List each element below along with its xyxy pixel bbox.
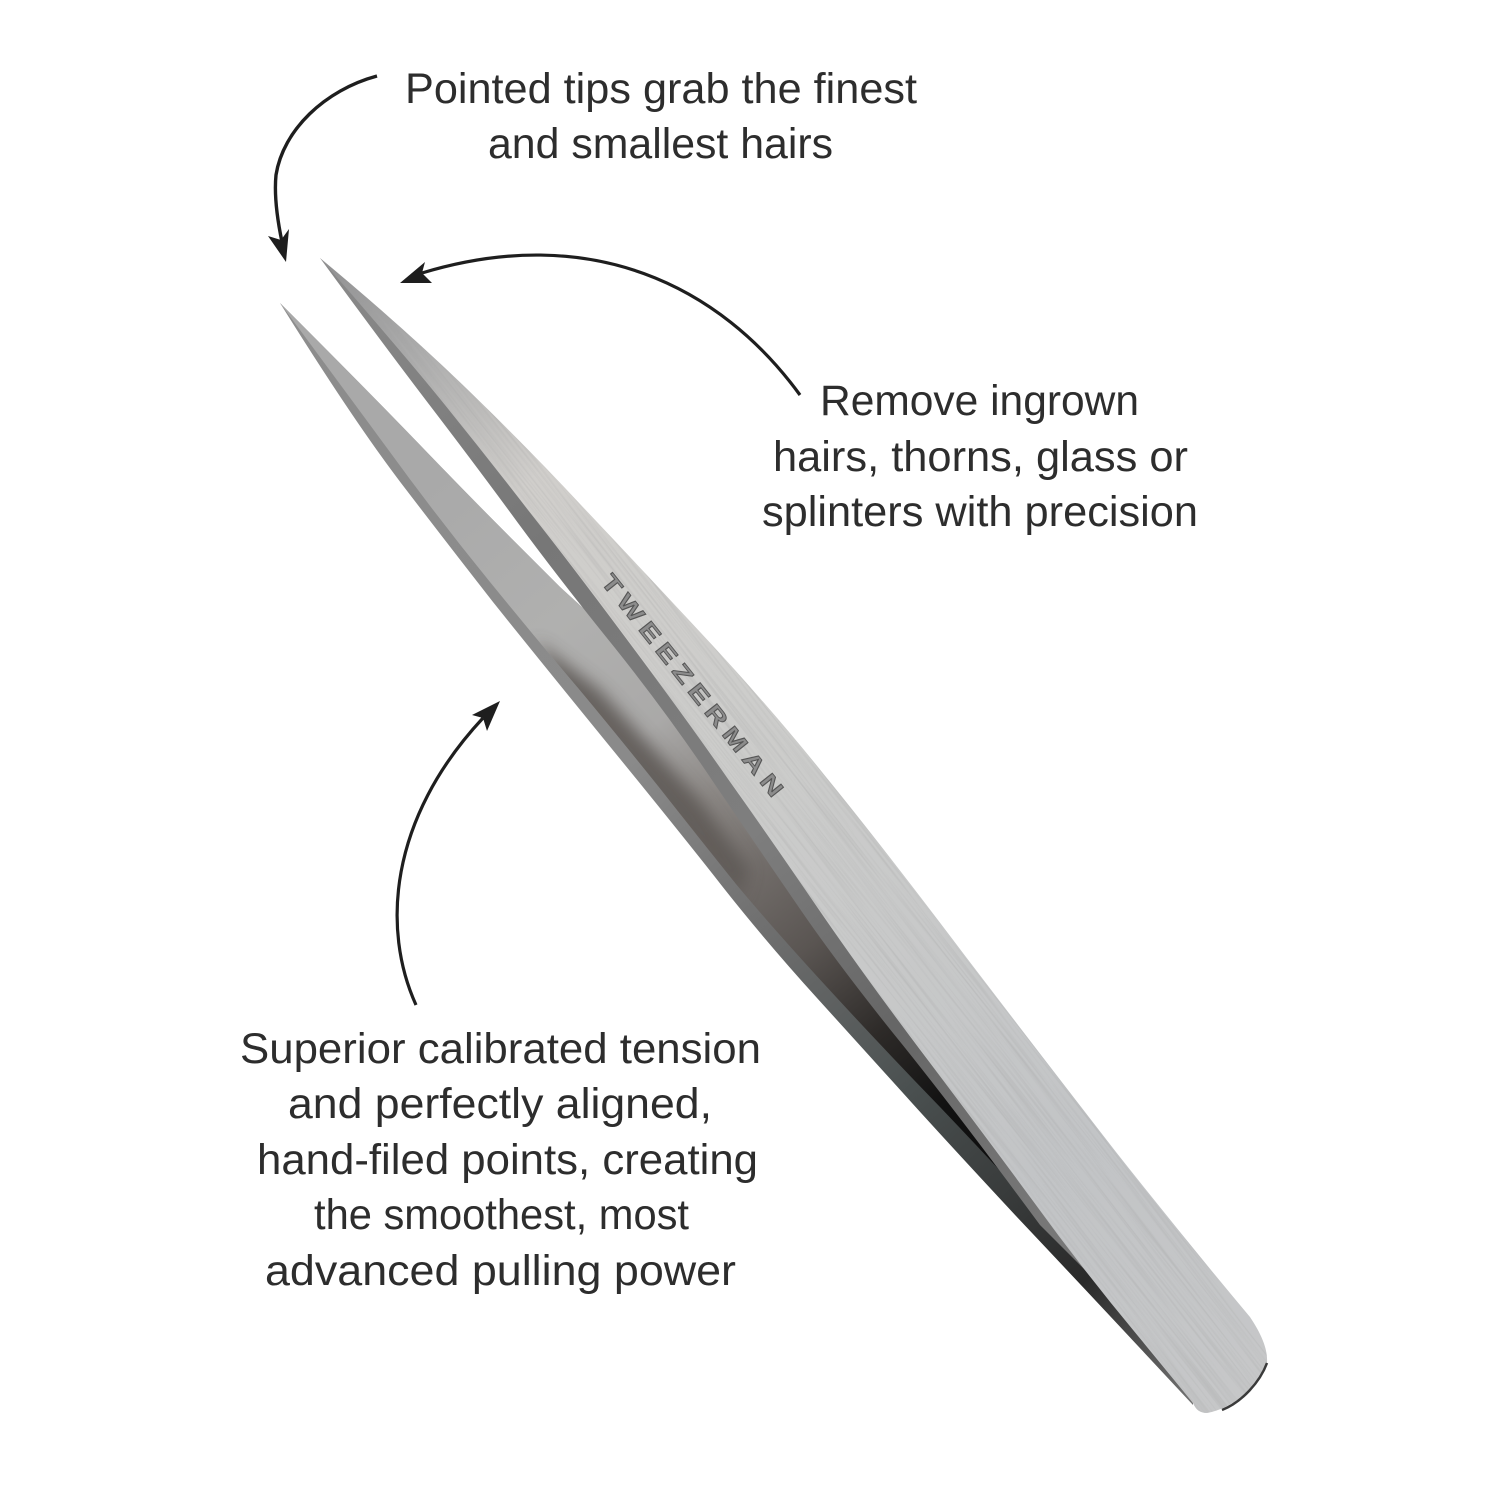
arrow: to tips [268, 76, 377, 262]
brushed metal texture [486, 416, 1261, 1408]
back blade [280, 303, 1193, 1405]
text: calibrated tension: the smoothest, most [314, 1191, 689, 1239]
callout: pointed tips [268, 65, 917, 262]
text: calibrated tension: hand-filed points, creating [257, 1136, 758, 1184]
tweezers [280, 258, 1268, 1413]
text: pointed tips: and smallest hairs [488, 120, 833, 168]
text: ingrown hairs: splinters with precision [762, 488, 1198, 536]
handle end shadow [1222, 1363, 1267, 1410]
text: ingrown hairs [762, 377, 1198, 536]
text: calibrated tension: advanced pulling power [265, 1247, 736, 1295]
text: ingrown hairs: Remove ingrown [820, 377, 1139, 425]
arrow: to blade [400, 255, 800, 395]
text: pointed tips: Pointed tips grab the finest [405, 65, 917, 113]
front blade face [320, 258, 1267, 1413]
callout: calibrated tension [240, 701, 761, 1295]
callout: ingrown hairs [400, 255, 1198, 536]
text: calibrated tension [240, 1025, 761, 1295]
text: ingrown hairs: hairs, thorns, glass or [773, 433, 1188, 481]
engraved logo: TWEEZERMAN [596, 569, 793, 807]
text: calibrated tension: and perfectly aligned, [288, 1080, 712, 1128]
text: calibrated tension: Superior calibrated tension [240, 1025, 761, 1073]
arrow: to tension point [397, 701, 500, 1005]
front blade bevel [320, 258, 1105, 1290]
text: pointed tips [405, 65, 917, 168]
